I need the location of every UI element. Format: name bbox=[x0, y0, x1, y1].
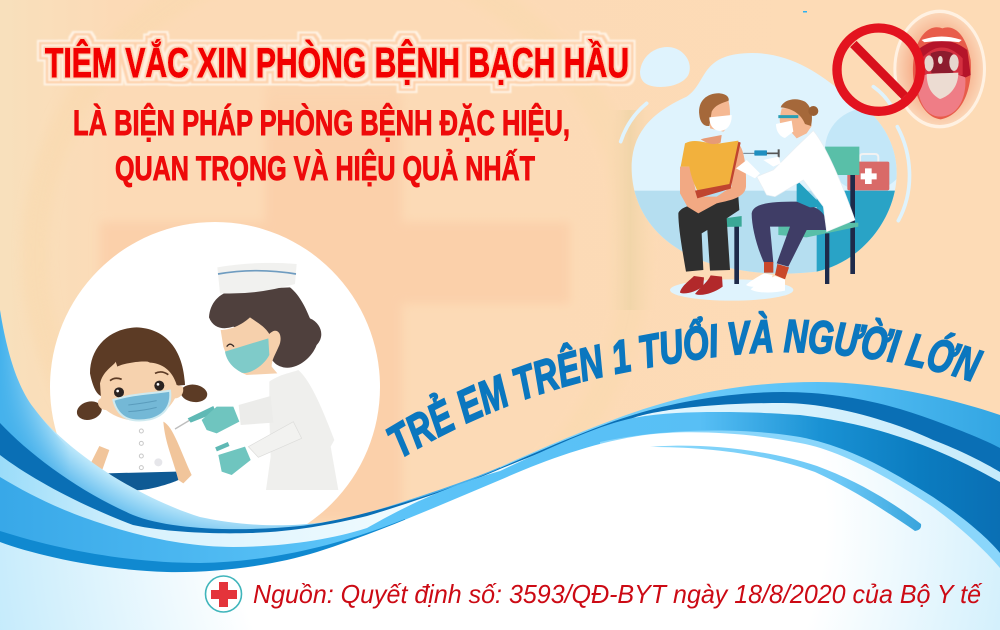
blob shading bbox=[634, 110, 896, 274]
wave: dark underside of band bbox=[0, 519, 405, 630]
medical kit bbox=[847, 154, 889, 190]
uvula bbox=[938, 56, 943, 64]
patient neck bbox=[701, 135, 722, 144]
illustration: nurse vaccinating child in white circle bbox=[50, 222, 380, 552]
lower glove bbox=[218, 447, 251, 475]
shirt buttons bbox=[139, 429, 143, 470]
doctor hair bbox=[781, 99, 812, 126]
doctor trousers bbox=[752, 202, 826, 267]
patient chair bbox=[701, 216, 742, 284]
right tonsil bbox=[949, 54, 959, 71]
shirt hem bbox=[695, 142, 741, 198]
teeth bbox=[923, 37, 960, 41]
wave: upper light ribbon left bbox=[0, 310, 500, 630]
child mask bbox=[113, 391, 170, 421]
main blob bbox=[632, 53, 897, 274]
thin arc accent bbox=[650, 446, 921, 531]
doctor mask bbox=[776, 121, 793, 138]
patient trousers bbox=[678, 197, 739, 272]
hat stripe bbox=[218, 271, 296, 274]
child right arm bbox=[163, 422, 192, 483]
right pigtail bbox=[180, 383, 208, 404]
tongue bbox=[917, 73, 965, 117]
icon: prohibition sign bbox=[837, 28, 920, 111]
syringe bbox=[743, 149, 780, 157]
membrane on tongue bbox=[927, 73, 958, 99]
title: TIÊM VẮC XIN PHÒNG BỆNH BẠCH HẦU bbox=[45, 38, 629, 86]
icon: red cross badge bbox=[206, 576, 242, 612]
syringe body bbox=[188, 406, 216, 423]
doctor neck and face bbox=[780, 107, 812, 138]
mouth cavity bbox=[917, 40, 971, 82]
child face bbox=[98, 361, 183, 421]
illustration: infected throat bbox=[893, 10, 986, 128]
palate bbox=[922, 47, 963, 75]
doctor inner shirt bbox=[797, 180, 823, 207]
doctor hair bun bbox=[808, 106, 818, 116]
patient arms bbox=[680, 142, 746, 213]
source note: Nguồn: Quyết định số: 3593/QĐ-BYT ngày 18/8/2020 của Bộ Y tế bbox=[253, 579, 982, 609]
nurse mask bbox=[225, 338, 269, 373]
side accents bbox=[621, 87, 910, 221]
subtitle line 1: LÀ BIỆN PHÁP PHÒNG BỆNH ĐẶC HIỆU, bbox=[73, 103, 570, 143]
throat bbox=[931, 51, 953, 73]
nurse hat bbox=[217, 263, 297, 294]
doctor gloves bbox=[736, 157, 781, 178]
target group slogan: TRẺ EM TRÊN 1 TUỔI VÀ NGƯỜI LỚN bbox=[385, 310, 985, 458]
nurse torso bbox=[266, 370, 338, 490]
lips bbox=[913, 27, 971, 119]
nurse hair bbox=[209, 287, 321, 368]
eye highlights bbox=[116, 383, 159, 392]
doctor shoes bbox=[746, 273, 785, 293]
syringe needle bbox=[175, 420, 190, 429]
wave: dark blue band bbox=[0, 392, 1000, 630]
shirt badge bbox=[154, 458, 162, 466]
eyebrows bbox=[110, 372, 168, 381]
doctor goggles bbox=[778, 112, 798, 121]
wave: lower blue band bbox=[0, 412, 1000, 630]
illustration: doctor vaccinating adult bbox=[621, 47, 910, 301]
doctor chair bbox=[778, 147, 859, 284]
mask lines bbox=[128, 401, 157, 412]
left pigtail bbox=[75, 399, 104, 423]
white lower panel bbox=[0, 432, 1000, 630]
small blob bbox=[640, 47, 690, 87]
face skin bbox=[896, 13, 983, 125]
wave: upper ribbon right bbox=[500, 382, 1000, 630]
child eyes bbox=[114, 381, 164, 397]
floor shadow bbox=[670, 279, 793, 301]
patient mask bbox=[709, 115, 732, 131]
nurse upper sleeve bbox=[239, 396, 273, 425]
face glow bbox=[893, 10, 986, 128]
patient shirt bbox=[681, 141, 738, 193]
wave: left tip tint bbox=[0, 310, 70, 630]
patient shoes bbox=[680, 275, 723, 295]
child hair bbox=[90, 327, 185, 397]
nurse eye bbox=[227, 344, 234, 347]
wave: pale ribbon bbox=[0, 403, 1000, 630]
vial bbox=[216, 444, 229, 449]
nurse face bbox=[221, 317, 281, 375]
child skirt bbox=[106, 472, 178, 490]
doctor socks bbox=[764, 262, 789, 279]
doctor coat bbox=[757, 131, 855, 232]
child left arm bbox=[91, 446, 109, 472]
left tonsil bbox=[924, 55, 934, 71]
patient hair bbox=[699, 93, 729, 126]
wave: light lower edge bbox=[600, 430, 1000, 630]
subtitle line 2: QUAN TRỌNG VÀ HIỆU QUẢ NHẤT bbox=[115, 150, 535, 188]
upper glove bbox=[202, 407, 239, 433]
patient face bbox=[708, 100, 730, 132]
nurse lower sleeve bbox=[248, 422, 302, 457]
